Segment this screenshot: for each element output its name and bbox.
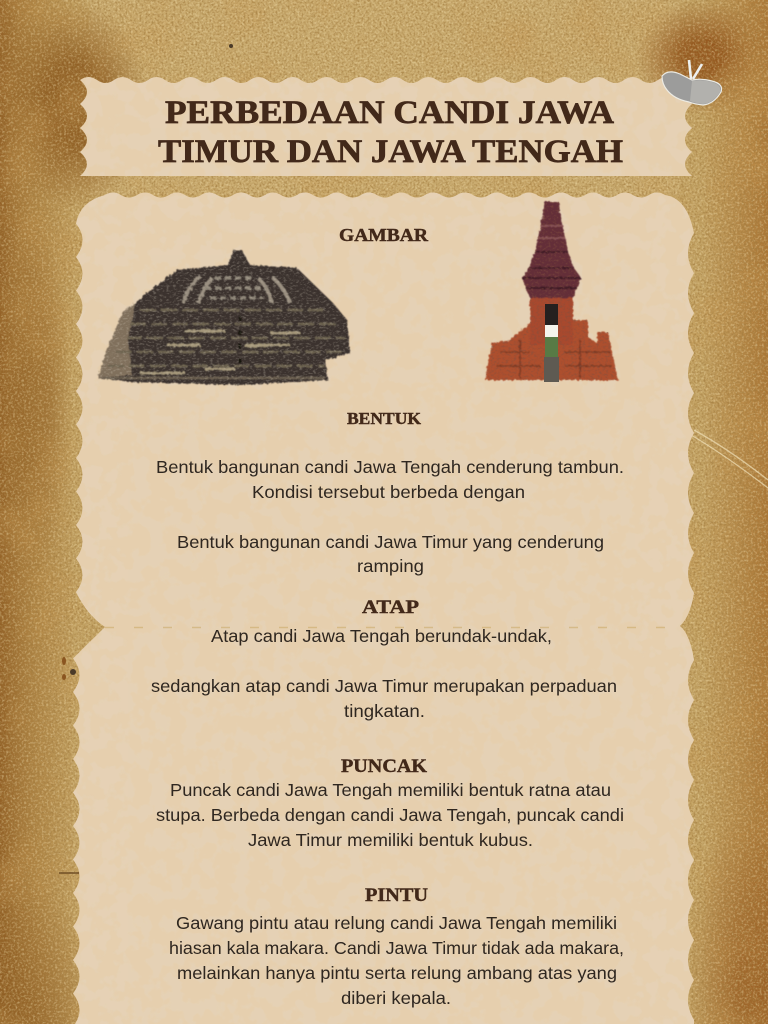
heading: puncak: PUNCAK <box>341 756 427 777</box>
heading: pintu: PINTU <box>365 885 428 906</box>
text: puncak description: stupa. Berbeda dengan candi Jawa Tengah, puncak candi <box>156 805 624 825</box>
heading: bentuk: BENTUK <box>347 409 422 428</box>
illustration: Candi Jawa Timur <box>485 202 618 382</box>
icon: butterfly <box>662 60 722 105</box>
heading: atap: ATAP <box>362 597 419 618</box>
text: bentuk description: Kondisi tersebut berbeda dengan <box>252 482 525 502</box>
text: bentuk description: ramping <box>357 556 424 576</box>
text: pintu description: diberi kepala. <box>341 988 451 1008</box>
text: bentuk description: Bentuk bangunan candi Jawa Tengah cenderung tambun. <box>156 457 624 477</box>
section: pintu <box>169 885 624 1008</box>
title panel <box>80 77 692 176</box>
text: pintu description: hiasan kala makara. Candi Jawa Timur tidak ada makara, <box>169 938 624 958</box>
text: puncak description: Jawa Timur memiliki bentuk kubus. <box>248 830 533 850</box>
text: atap description: Atap candi Jawa Tengah berundak-undak, <box>211 626 552 646</box>
illustration: Candi Borobudur, Jawa Tengah <box>98 250 350 385</box>
title: PERBEDAAN CANDI JAWA <box>165 95 614 131</box>
text: bentuk description: Bentuk bangunan candi Jawa Timur yang cenderung <box>177 532 604 552</box>
text: pintu description: Gawang pintu atau relung candi Jawa Tengah memiliki <box>176 913 617 933</box>
text: atap description: tingkatan. <box>344 701 425 721</box>
text: puncak description <box>156 780 624 850</box>
section: atap <box>151 597 617 721</box>
text: pintu description: melainkan hanya pintu serta relung ambang atas yang <box>177 963 617 983</box>
text: bentuk description <box>156 457 624 576</box>
text: puncak description: Puncak candi Jawa Tengah memiliki bentuk ratna atau <box>170 780 611 800</box>
text: atap description <box>151 626 617 721</box>
title <box>158 95 623 170</box>
heading: gambar: GAMBAR <box>339 225 429 245</box>
text: pintu description <box>169 913 624 1008</box>
title: TIMUR DAN JAWA TENGAH <box>158 134 623 170</box>
section: puncak <box>156 756 624 850</box>
text: atap description: sedangkan atap candi Jawa Timur merupakan perpaduan <box>151 676 617 696</box>
content panel <box>60 185 710 1024</box>
section: bentuk <box>156 409 624 576</box>
